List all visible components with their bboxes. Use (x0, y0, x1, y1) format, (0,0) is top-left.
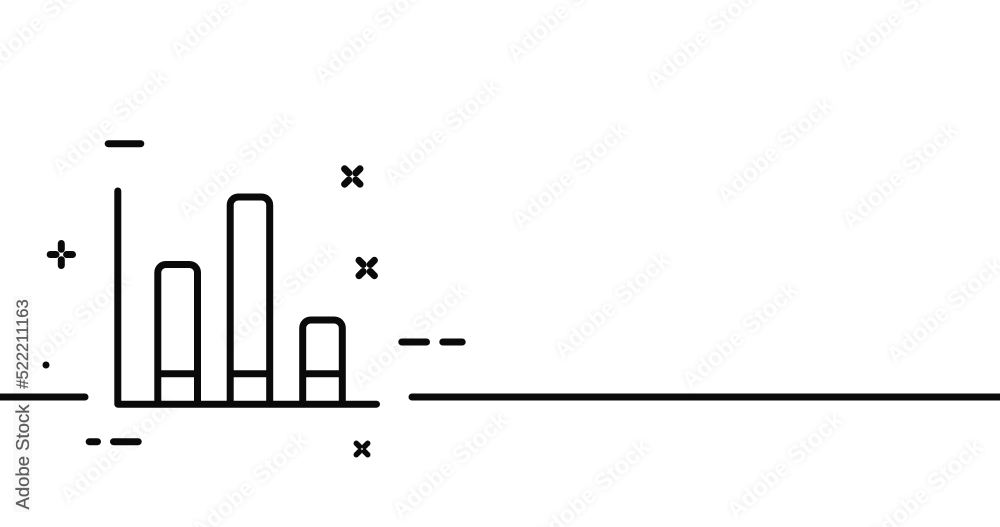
watermark: repeated Adobe Stock pattern: Adobe Stock (836, 116, 964, 235)
horizon line: left segment (0, 394, 85, 400)
watermark: repeated Adobe Stock pattern: Adobe Stock (8, 266, 136, 385)
watermark: repeated Adobe Stock pattern: Adobe Stock (506, 116, 634, 235)
watermark: repeated Adobe Stock pattern: Adobe Stock (676, 276, 804, 395)
icon: x sparkle bottom (356, 443, 368, 455)
watermark: repeated Adobe Stock pattern: Adobe Stock (711, 91, 839, 210)
watermark: repeated Adobe Stock pattern: Adobe Stock (46, 63, 174, 182)
icon: plus sparkle (50, 244, 72, 266)
watermark: repeated Adobe Stock pattern: Adobe Stock (386, 406, 514, 525)
watermark: repeated Adobe Stock pattern: Adobe Stock (346, 276, 474, 395)
dashes lower left (89, 438, 138, 445)
watermark: repeated Adobe Stock pattern: Adobe Stock (378, 73, 506, 192)
bar 1 (158, 264, 198, 404)
bar 2 (230, 197, 270, 404)
horizon line: right segment (412, 394, 1000, 400)
vertical stock image id label: Adobe Stock (12, 405, 32, 509)
vertical stock image id label: #522211163 (14, 299, 32, 389)
bar 3 (303, 320, 342, 404)
vertical stock image id label (13, 296, 32, 512)
watermark: repeated Adobe Stock pattern: Adobe Stock (548, 246, 676, 365)
watermark: repeated Adobe Stock pattern: Adobe Stock (721, 406, 849, 525)
watermark: repeated Adobe Stock pattern: Adobe Stock (216, 236, 344, 355)
dash above chart (108, 140, 141, 147)
dashes right of chart (402, 338, 462, 346)
dot (42, 362, 50, 368)
icon: x sparkle top (345, 169, 360, 184)
watermark: repeated Adobe Stock pattern: Adobe Stock (54, 391, 182, 510)
chart axes (118, 191, 377, 404)
icon: x sparkle middle (359, 260, 374, 276)
watermark: repeated Adobe Stock pattern: Adobe Stock (172, 106, 300, 225)
